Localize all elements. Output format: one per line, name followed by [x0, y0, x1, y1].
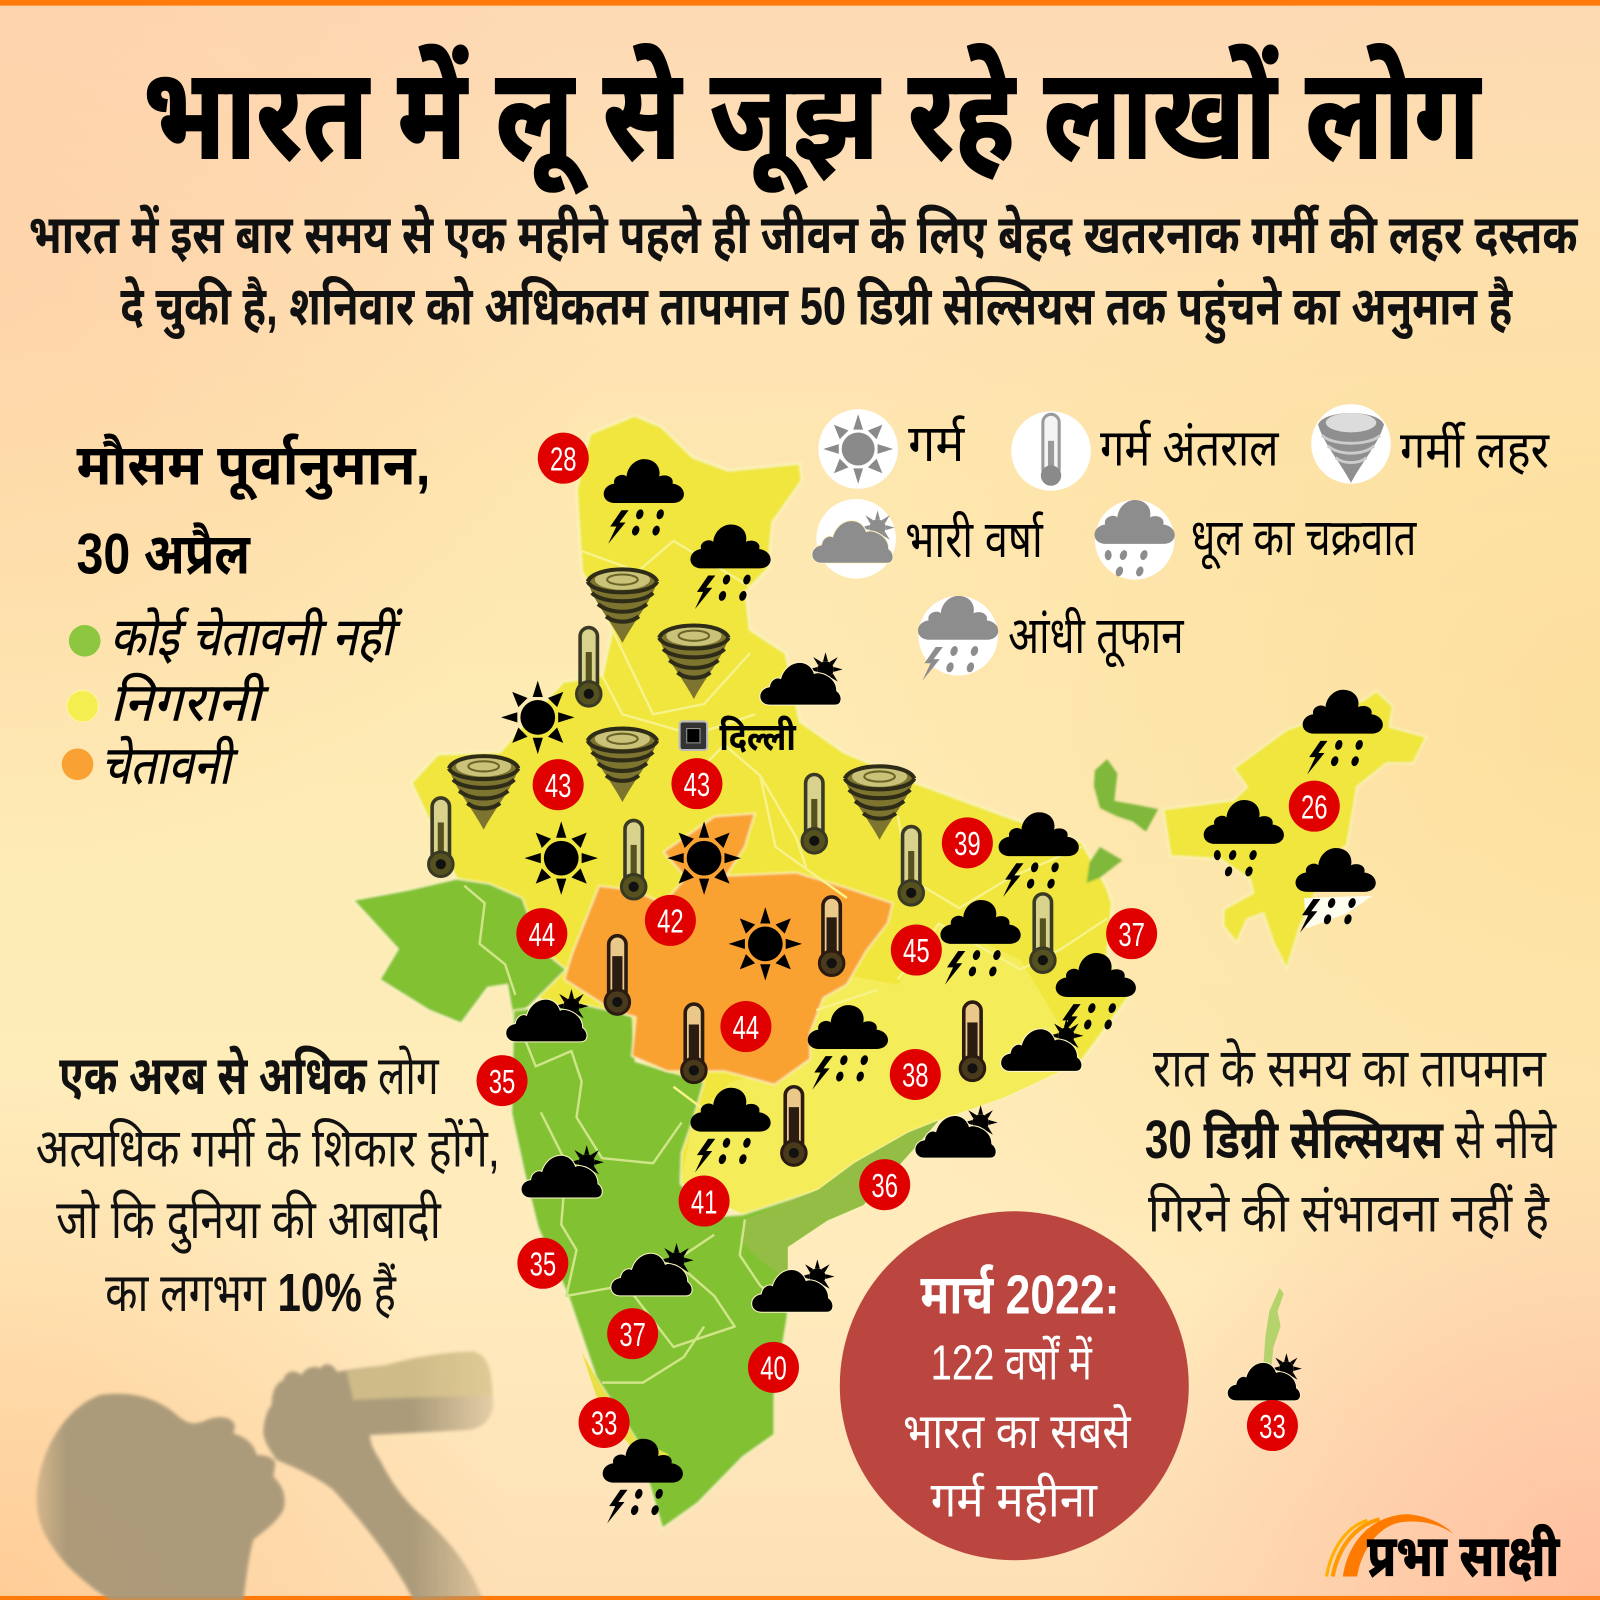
- alert legend: चेतावनी: [101, 736, 239, 796]
- mainland yellow states: [411, 415, 1133, 1220]
- forecast heading: 30 अप्रैल: [77, 520, 251, 586]
- temperature badges: 44: [529, 917, 555, 954]
- Sikkim and North Bengal green: [1087, 759, 1158, 883]
- night temperature text: [1145, 1038, 1557, 1244]
- Chhattisgarh and Odisha lighter yellow: [681, 923, 1082, 1220]
- callout: march 2022: मार्च 2022:: [920, 1263, 1119, 1325]
- temperature badges: 43: [545, 768, 571, 805]
- weather icons: rain clouds: [603, 459, 1383, 1523]
- delhi marker: दिल्ली: [719, 715, 796, 759]
- temperature badges: 35: [530, 1247, 556, 1284]
- delhi marker: [680, 715, 796, 759]
- callout: march 2022: भारत का सबसे: [903, 1403, 1131, 1459]
- temperature badges: 37: [619, 1317, 646, 1354]
- temperature badges: 43: [684, 767, 710, 804]
- orange region: [564, 813, 893, 1085]
- Andhra coast tint: [740, 1120, 939, 1281]
- population text: का लगभग 10% हैं: [105, 1262, 397, 1323]
- temperature badges: 42: [657, 904, 684, 941]
- temperature badges: 33: [591, 1406, 617, 1443]
- weather key: धूल का चक्रवात: [1191, 509, 1417, 570]
- population text: [36, 1045, 500, 1323]
- weather icons: thermometer: [429, 628, 1055, 1165]
- Kerala yellow sliver: [582, 1352, 668, 1480]
- temperature badges: 36: [871, 1168, 898, 1205]
- weather key: गर्म: [908, 415, 966, 472]
- population text: अत्यधिक गर्मी के शिकार होंगे,: [36, 1117, 500, 1178]
- callout: march 2022: गर्म महीना: [931, 1471, 1098, 1527]
- temperature badges: [477, 433, 1340, 1451]
- temperature badges: 39: [954, 826, 981, 863]
- Northeast states: [1163, 691, 1427, 969]
- alert legend: कोई चेतावनी नहीं: [110, 607, 403, 667]
- weather icons: cloud with sun: [506, 652, 1302, 1401]
- photo: man drinking from bottle: [37, 1352, 493, 1600]
- night temperature text: 30 डिग्री सेल्सियस से नीचे: [1145, 1109, 1557, 1170]
- temperature badges: 26: [1301, 789, 1328, 826]
- logo: Prabha Sakshi: [1327, 1514, 1560, 1589]
- Andaman strip: [1263, 1288, 1284, 1367]
- weather icons: sun: [501, 681, 802, 981]
- logo: Prabha Sakshi: प्रभा साक्षी: [1367, 1524, 1560, 1589]
- callout: march 2022: [840, 1211, 1189, 1560]
- patch behind rain icon: [1304, 896, 1372, 929]
- subtitle: [29, 204, 1578, 344]
- population text: जो कि दुनिया की आबादी: [56, 1189, 442, 1254]
- temperature badges: 41: [691, 1184, 717, 1221]
- forecast heading: मौसम पूर्वानुमान,: [77, 433, 431, 502]
- temperature badges: 35: [489, 1064, 515, 1101]
- population text: एक अरब से अधिक लोग: [59, 1045, 440, 1106]
- weather key: भारी वर्षा: [905, 511, 1044, 568]
- weather key: गर्मी लहर: [1400, 421, 1550, 478]
- alert legend: [62, 607, 403, 796]
- temperature badges: 38: [902, 1058, 929, 1095]
- temperature badges: 33: [1259, 1409, 1286, 1446]
- temperature badges: 28: [550, 441, 577, 478]
- temperature badges: 44: [733, 1010, 759, 1047]
- weather key: आंधी तूफान: [1008, 607, 1185, 668]
- weather key: [812, 404, 1550, 681]
- temperature badges: 37: [1118, 917, 1145, 954]
- weather icons: tornado: [449, 569, 914, 840]
- temperature badges: 40: [760, 1351, 787, 1388]
- peninsula green: [511, 1005, 939, 1529]
- weather key: गर्म अंतराल: [1100, 419, 1280, 476]
- Gujarat green: [353, 879, 566, 1023]
- callout: march 2022: 122 वर्षों में: [931, 1336, 1092, 1391]
- forecast heading: [77, 433, 431, 586]
- temperature badges: 45: [903, 933, 930, 970]
- map of India: [353, 415, 1427, 1529]
- alert legend: निगरानी: [110, 672, 269, 732]
